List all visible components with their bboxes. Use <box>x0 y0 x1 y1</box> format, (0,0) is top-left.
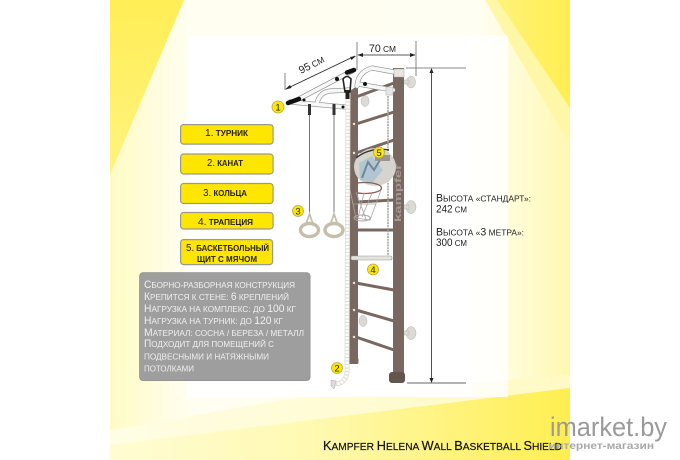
panel: specifications: НАГРУЗКА НА КОМПЛЕКС: ДО 100 КГ <box>144 303 296 315</box>
height text: 242 СМ <box>436 204 467 216</box>
number marker 3 <box>292 206 304 218</box>
number marker 4 <box>368 264 378 276</box>
height text: ВЫСОТА «СТАНДАРТ»: <box>436 192 531 204</box>
basketball backboard with hoop <box>348 148 396 221</box>
gymnastic rings <box>300 104 343 236</box>
dimension: 95 cm depth: 95 СМ <box>297 54 326 77</box>
dimension: 95 cm depth <box>285 54 356 90</box>
panel: specifications: ПОТОЛКАМИ <box>144 364 194 374</box>
panel: specifications <box>140 273 310 381</box>
panel: specifications: ПОДВЕСНЫМИ И НАТЯЖНЫМИ <box>144 352 269 362</box>
label box: 5. баскетбольный щит с мячом: ЩИТ С МЯЧОМ <box>197 255 257 264</box>
number marker 2: 2 <box>334 364 340 374</box>
panel: specifications: НАГРУЗКА НА ТУРНИК: ДО 120 КГ <box>144 315 283 327</box>
number marker 4: 4 <box>370 265 376 276</box>
watermark: imarket.by: интернет-магазин <box>549 440 654 452</box>
label box: 5. баскетбольный щит с мячом: 5. БАСКЕТБОЛЬНЫЙ <box>186 243 269 254</box>
rungs <box>356 83 394 350</box>
wall bars ladder <box>348 68 416 383</box>
wall mounts <box>359 76 416 340</box>
label box: 3. кольца: 3. КОЛЬЦА <box>203 188 247 199</box>
label box: 3. кольца <box>181 184 273 204</box>
panel: specifications: ПОДХОДИТ ДЛЯ ПОМЕЩЕНИЙ С <box>144 338 274 350</box>
right post <box>393 68 404 376</box>
dimension: height <box>406 68 466 383</box>
number marker 3: 3 <box>295 206 301 218</box>
height text <box>436 192 531 249</box>
trapeze <box>351 96 392 260</box>
label box: 1. турник <box>181 125 273 144</box>
dimension: 70 cm width <box>357 41 416 76</box>
number marker 5 <box>374 147 384 159</box>
panel: specifications: СБОРНО-РАЗБОРНАЯ КОНСТРУКЦИЯ <box>144 279 295 291</box>
label box: 4. трапеция: 4. ТРАПЕЦИЯ <box>198 217 253 228</box>
label box: 2. канат: 2. КАНАТ <box>207 158 243 169</box>
height text: 300 СМ <box>436 237 467 249</box>
dimension: 70 cm width: 70 СМ <box>369 43 396 55</box>
number marker 1: 1 <box>275 102 281 114</box>
brand lettering: kampfer <box>393 163 403 222</box>
background: yellow sunburst <box>110 0 570 460</box>
label box: 2. канат <box>181 154 273 174</box>
label box: 1. турник: 1. ТУРНИК <box>205 128 248 139</box>
pull-up bar <box>288 68 404 108</box>
height text: ВЫСОТА «3 МЕТРА»: <box>436 226 524 238</box>
product title: KAMPFER HELENA WALL BASKETBALL SHIELD <box>323 439 562 453</box>
number marker 1 <box>272 101 284 114</box>
panel: specifications: МАТЕРИАЛ: СОСНА / БЕРЕЗА / МЕТАЛЛ <box>144 327 304 339</box>
label box: 5. баскетбольный щит с мячом <box>181 240 273 265</box>
watermark: imarket.by: imarket.by <box>550 412 667 442</box>
climbing rope <box>331 76 351 389</box>
number marker 2 <box>332 362 342 374</box>
panel: specifications: КРЕПИТСЯ К СТЕНЕ: 6 КРЕПЛЕНИЙ <box>144 291 289 303</box>
left post <box>349 85 358 363</box>
number marker 5: 5 <box>376 148 382 159</box>
rung bolts <box>353 123 355 338</box>
label box: 4. трапеция <box>181 212 273 229</box>
